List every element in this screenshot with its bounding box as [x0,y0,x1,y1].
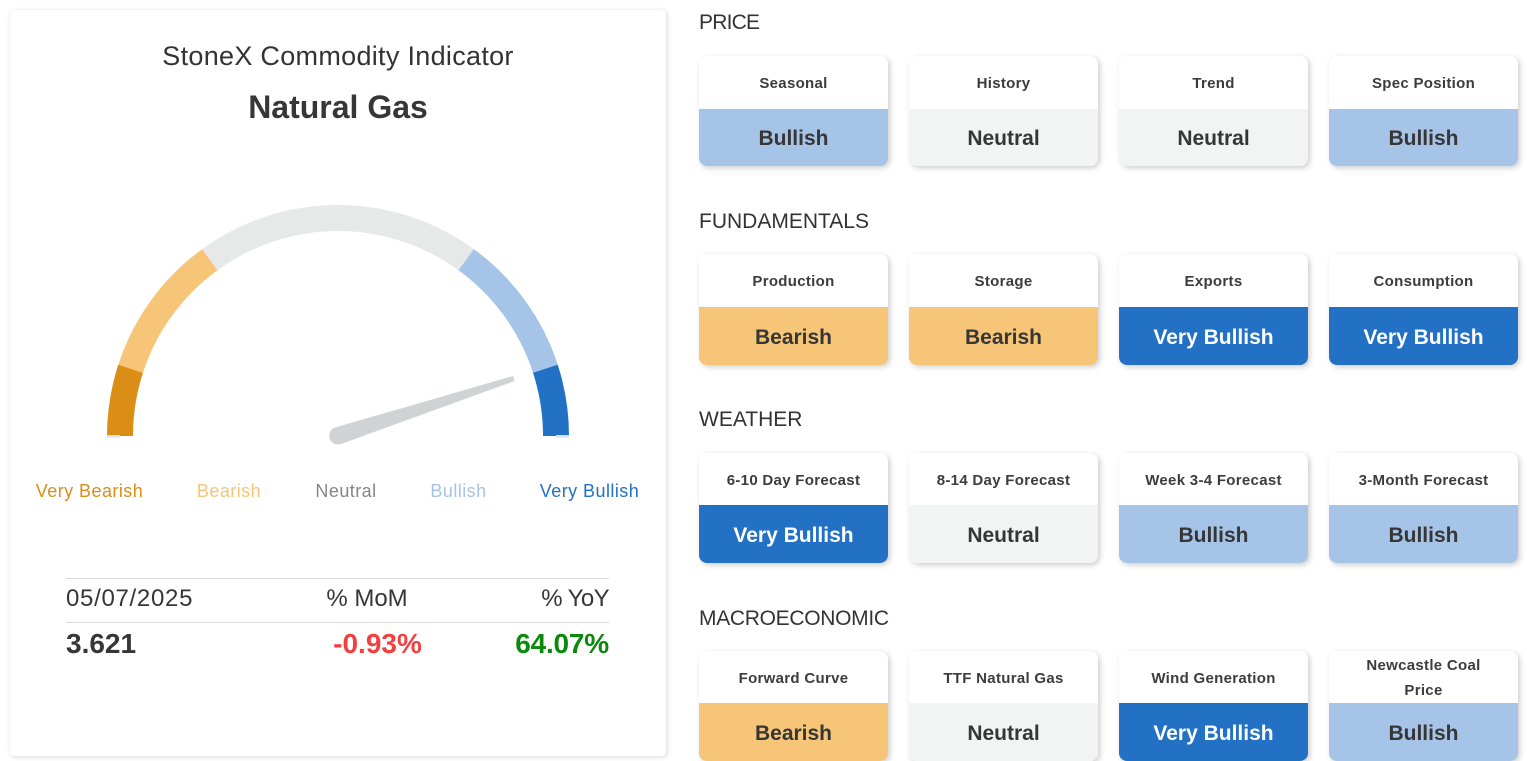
gauge segment: very bearish [107,365,143,436]
card: spec position: Bullish [1388,126,1458,150]
card: spec position: Spec Position [1372,75,1475,92]
card: trend: Neutral [1177,126,1250,150]
card: exports [1119,254,1308,365]
gauge segment: bearish [118,249,218,373]
card: exports: Exports [1185,273,1242,290]
gauge segment: very bullish [533,365,569,436]
card: forward curve [699,651,888,761]
card: week 3-4 forecast: Bullish [1178,524,1248,547]
card: week 3-4 forecast [1119,453,1308,563]
card: 3-month forecast: Bullish [1388,524,1458,547]
card: ttf natural gas [909,651,1098,761]
card: 8-14 day forecast: Neutral [967,524,1040,547]
legend: bullish: Bullish [430,481,487,501]
card: seasonal: Bullish [758,126,828,150]
card: 6-10 day forecast: 6-10 Day Forecast [727,472,860,488]
left base tick [107,435,120,438]
card: storage [909,254,1098,365]
card: seasonal: Seasonal [759,75,828,92]
card: ttf natural gas: TTF Natural Gas [943,670,1064,686]
card: history: Neutral [967,126,1040,150]
card: newcastle coal price [1329,651,1518,761]
price value: 3.621 [66,628,136,659]
gauge chart [107,205,569,444]
card: wind generation: Wind Generation [1151,670,1276,686]
MoM value: -0.93% [333,628,422,659]
card: forward curve: Bearish [755,722,832,745]
YoY value: 64.07% [515,628,609,659]
panel: commodity indicator [10,10,666,756]
gauge segment: neutral [202,205,474,270]
card: storage: Storage [975,273,1032,290]
card: production: Production [752,273,835,290]
legend: neutral: Neutral [315,481,377,501]
heading: price: PRICE [699,11,759,34]
card: 8-14 day forecast: 8-14 Day Forecast [937,472,1070,488]
card: forward curve: Forward Curve [739,670,848,686]
card: 3-month forecast: 3-Month Forecast [1359,472,1488,488]
card: 8-14 day forecast [909,453,1098,563]
card: trend: Trend [1192,75,1235,92]
card: history [909,56,1098,166]
card: storage: Bearish [965,326,1042,349]
MoM header: % MoM [326,585,408,612]
right base tick [556,435,569,438]
card: newcastle coal price: Price [1404,682,1443,699]
card: week 3-4 forecast: Week 3-4 Forecast [1145,472,1282,488]
card: 3-month forecast [1329,453,1518,563]
card: production [699,254,888,365]
card: seasonal [699,56,888,166]
legend: very bearish: Very Bearish [36,481,143,501]
card: wind generation [1119,651,1308,761]
card: newcastle coal price: Bullish [1388,722,1458,745]
card: newcastle coal price: Newcastle Coal [1366,657,1481,674]
title: StoneX Commodity Indicator [162,41,514,71]
date label: 05/07/2025 [66,585,193,612]
heading: fundamentals: FUNDAMENTALS [699,210,869,233]
commodity name heading: Natural Gas [248,89,428,125]
card: trend [1119,56,1308,166]
card: production: Bearish [755,326,832,349]
card: 6-10 day forecast [699,453,888,563]
card: ttf natural gas: Neutral [967,722,1040,745]
card: wind generation: Very Bullish [1153,722,1274,745]
card: consumption: Consumption [1374,273,1473,290]
card: exports: Very Bullish [1153,326,1274,349]
heading: weather: WEATHER [699,408,802,431]
card: 6-10 day forecast: Very Bullish [733,524,854,547]
gauge needle [329,376,514,445]
gauge segment: bullish [458,249,558,373]
legend: bearish: Bearish [197,481,261,501]
card: history: History [977,75,1030,92]
card: spec position [1329,56,1518,166]
card: consumption: Very Bullish [1363,326,1484,349]
YoY header: % YoY [541,585,609,612]
heading: macroeconomic: MACROECONOMIC [699,607,889,630]
legend: very bullish: Very Bullish [540,481,639,501]
card: consumption [1329,254,1518,365]
